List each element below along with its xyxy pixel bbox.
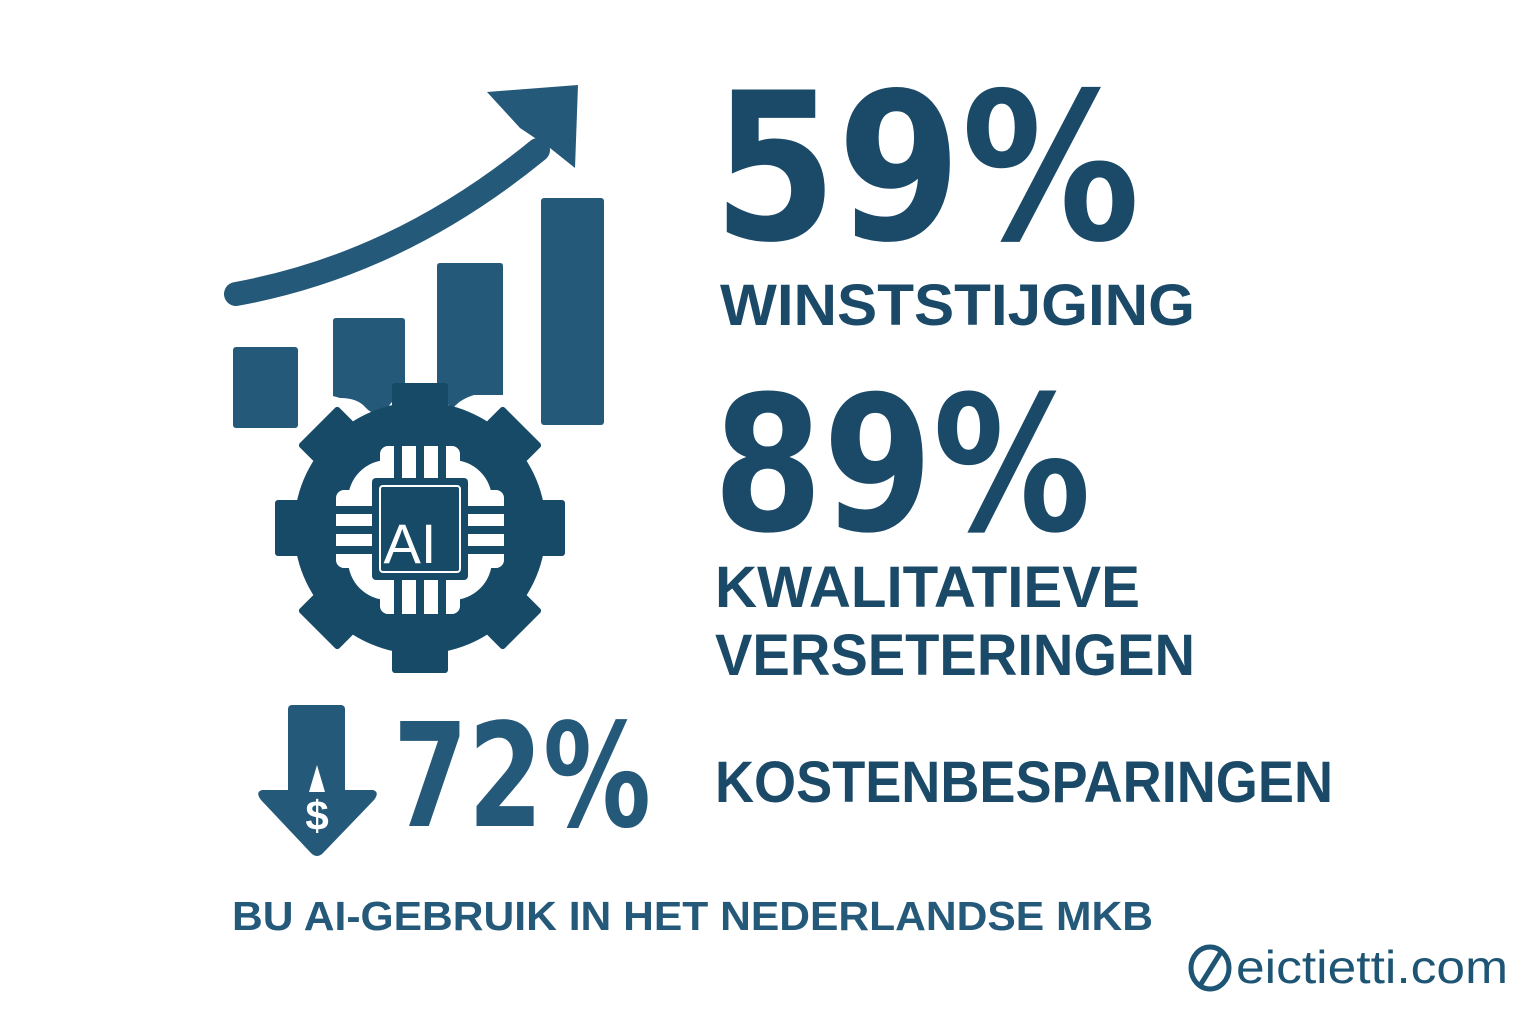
stat: 72% bbox=[393, 692, 1333, 860]
rising arrow bbox=[236, 85, 578, 294]
chip with wavy white surround: AI bbox=[384, 512, 436, 575]
stat: 89%: VERSETERINGEN bbox=[715, 623, 1195, 688]
icon: down arrow with dollar bbox=[258, 705, 377, 856]
icon: down arrow with dollar: $ bbox=[305, 792, 329, 839]
chip with wavy white surround bbox=[336, 446, 504, 614]
icon: AI gear bbox=[275, 383, 565, 673]
label: winststijging: WINSTSTIJGING bbox=[720, 273, 1195, 338]
label: kwalitatieve verseteringen: KWALITATIEVE bbox=[715, 555, 1140, 620]
icon: growth chart with rising arrow bbox=[233, 85, 604, 428]
stat: 72%: 72% bbox=[393, 692, 651, 860]
label: kostenbesparingen: KOSTENBESPARINGEN bbox=[715, 750, 1333, 815]
stat: 89% bbox=[713, 356, 1195, 688]
footer caption: BU AI-GEBRUIK IN HET NEDERLANDSE MKB bbox=[232, 893, 1153, 939]
logo: eictietti.com bbox=[1236, 941, 1508, 993]
stat: 89%: 89% bbox=[713, 356, 1091, 575]
logo icon bbox=[1191, 947, 1229, 989]
bars bbox=[233, 198, 604, 428]
stat: 59%: 59% bbox=[713, 50, 1140, 288]
